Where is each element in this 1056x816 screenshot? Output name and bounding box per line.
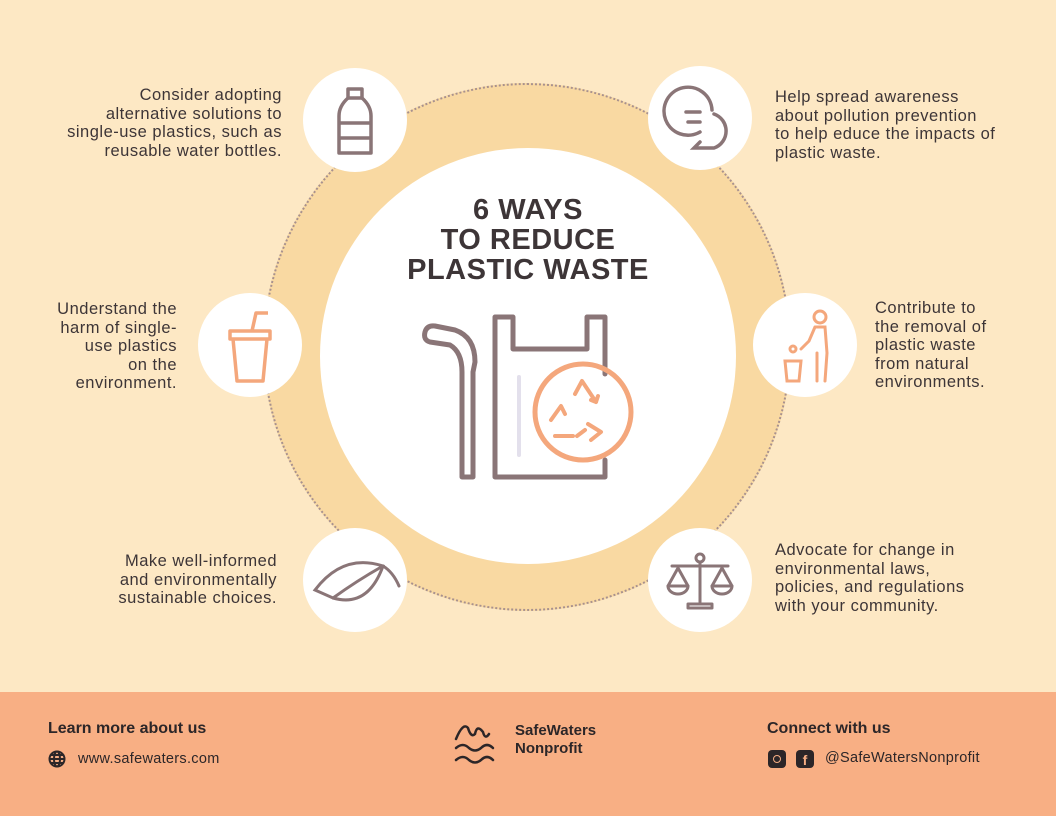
ring xyxy=(263,83,791,611)
text: advocate xyxy=(775,541,965,614)
title: TO REDUCE xyxy=(441,224,615,256)
circle: leaf xyxy=(303,528,407,632)
icons: social xyxy=(768,750,814,768)
text: awareness: Help spread awareness xyxy=(775,88,959,106)
text: bottles: reusable water bottles. xyxy=(104,142,282,160)
circle: scales xyxy=(648,528,752,632)
circle: cup xyxy=(198,293,302,397)
text: choices xyxy=(118,552,277,607)
text: bottles: alternative solutions to xyxy=(106,104,282,122)
footer xyxy=(0,692,1056,816)
logo xyxy=(454,725,494,764)
text: awareness: about pollution prevention xyxy=(775,106,977,124)
text: choices: Make well-informed xyxy=(125,552,277,570)
footer: connect: Connect with us xyxy=(767,720,891,737)
logo text: Nonprofit xyxy=(515,740,582,757)
text: harm: use plastics xyxy=(85,337,177,355)
footer: website: www.safewaters.com xyxy=(78,751,220,767)
text: harm: environment. xyxy=(76,374,177,392)
text: advocate: environmental laws, xyxy=(775,560,930,578)
circle: trash xyxy=(753,293,857,397)
footer: handle: @SafeWatersNonprofit xyxy=(825,750,980,766)
text: removal: plastic waste xyxy=(875,336,976,354)
text: awareness: plastic waste. xyxy=(775,144,881,162)
text: awareness: to help educe the impacts of xyxy=(775,125,995,143)
text: removal: the removal of xyxy=(875,318,987,336)
text: bottles: single-use plastics, such as xyxy=(67,123,282,141)
title: PLASTIC WASTE xyxy=(407,254,649,286)
circle: bottle xyxy=(303,68,407,172)
text: removal: Contribute to xyxy=(875,299,976,317)
text: choices: and environmentally xyxy=(120,570,277,588)
text: harm: harm of single- xyxy=(60,318,177,336)
text: removal xyxy=(875,299,987,391)
icons: social: f xyxy=(803,752,807,768)
text: choices: sustainable choices. xyxy=(118,589,277,607)
title: 6 WAYS xyxy=(473,194,583,226)
text: bottles xyxy=(67,86,282,160)
text: harm: on the xyxy=(128,356,177,374)
circle: chat xyxy=(648,66,752,170)
logo text: SafeWaters xyxy=(515,722,596,739)
text: harm: Understand the xyxy=(57,300,177,318)
center white circle xyxy=(320,148,736,564)
footer: learn more: Learn more about us xyxy=(48,720,206,737)
text: advocate: Advocate for change in xyxy=(775,541,955,559)
icon: straw and bag xyxy=(422,314,634,480)
title xyxy=(407,194,649,286)
text: bottles: Consider adopting xyxy=(140,86,282,104)
text: harm xyxy=(57,300,177,392)
text: advocate: with your community. xyxy=(775,596,939,614)
text: advocate: policies, and regulations xyxy=(775,578,965,596)
text: removal: from natural xyxy=(875,354,969,372)
text: removal: environments. xyxy=(875,373,985,391)
logo text xyxy=(515,722,596,757)
icon: globe xyxy=(48,750,66,768)
text: awareness xyxy=(775,88,995,162)
